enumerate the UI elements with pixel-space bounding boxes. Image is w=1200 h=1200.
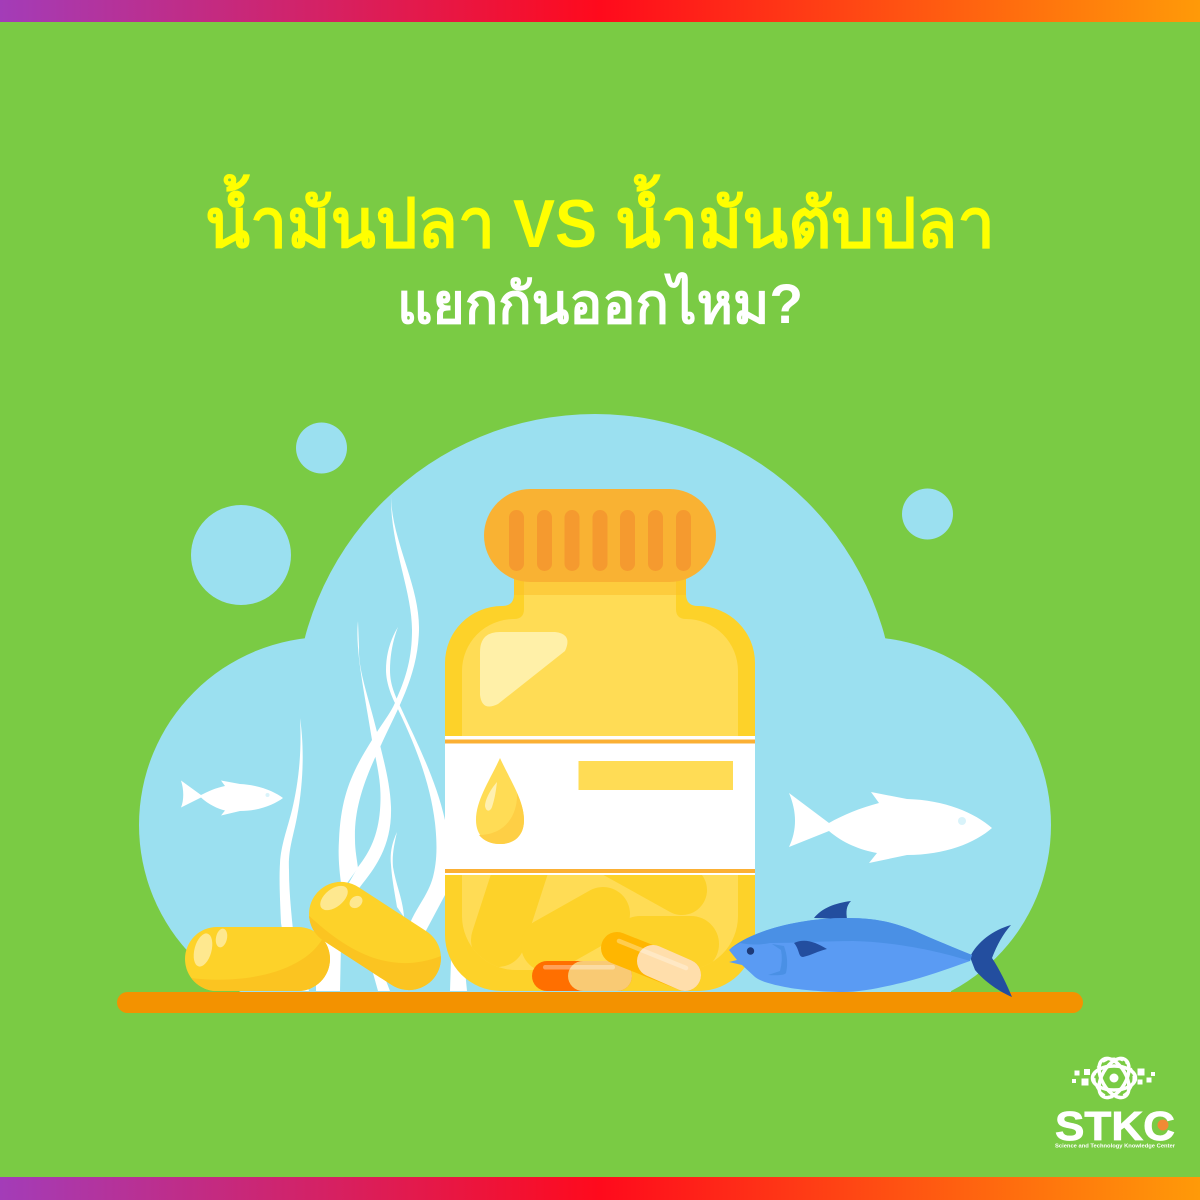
tail fin [970, 925, 1012, 997]
logo pixels [1072, 1068, 1155, 1086]
capsules inside bottle [498, 850, 691, 945]
title [205, 173, 995, 262]
STKC logo [1055, 1053, 1176, 1150]
title: น้ำมันปลา [205, 173, 495, 262]
fish back [729, 918, 972, 961]
bottom gradient bar [0, 1177, 1200, 1200]
logo tagline: Science and Technology Knowledge Center [1055, 1144, 1176, 1150]
capsule orange [532, 961, 632, 991]
dorsal fin [814, 901, 851, 919]
logo orange dot [1158, 1120, 1168, 1130]
bottle inner glass [462, 570, 738, 970]
gill mark [768, 944, 787, 975]
oil drop icon [476, 758, 524, 844]
capsule amber [617, 941, 686, 975]
bubble small left [296, 422, 347, 474]
fish eye [747, 947, 754, 955]
bubble large left [191, 505, 291, 605]
capsule flat left [185, 927, 330, 991]
capsule tilted [309, 882, 441, 990]
seaweed [280, 495, 467, 991]
bottle label [445, 736, 755, 875]
bottle [445, 489, 755, 991]
title: น้ำมันตับปลา [615, 173, 995, 262]
glass highlight [480, 632, 567, 707]
fish body [729, 918, 972, 992]
fish silhouette small [181, 780, 283, 816]
logo wordmark: STKC [1055, 1103, 1175, 1149]
bottle cap [484, 489, 716, 582]
pectoral fin [794, 941, 827, 957]
neck shadow [514, 570, 686, 595]
top gradient bar [0, 0, 1200, 22]
bottle body [445, 570, 755, 991]
shelf [117, 992, 1083, 1013]
subtitle: แยกกันออกไหม? [397, 271, 803, 335]
title: VS [513, 186, 597, 262]
blue fish [729, 901, 1012, 997]
fish silhouette large [789, 792, 992, 863]
water cloud backdrop [139, 414, 1051, 1014]
atom emblem [1092, 1053, 1136, 1103]
bubble small right [902, 488, 953, 540]
